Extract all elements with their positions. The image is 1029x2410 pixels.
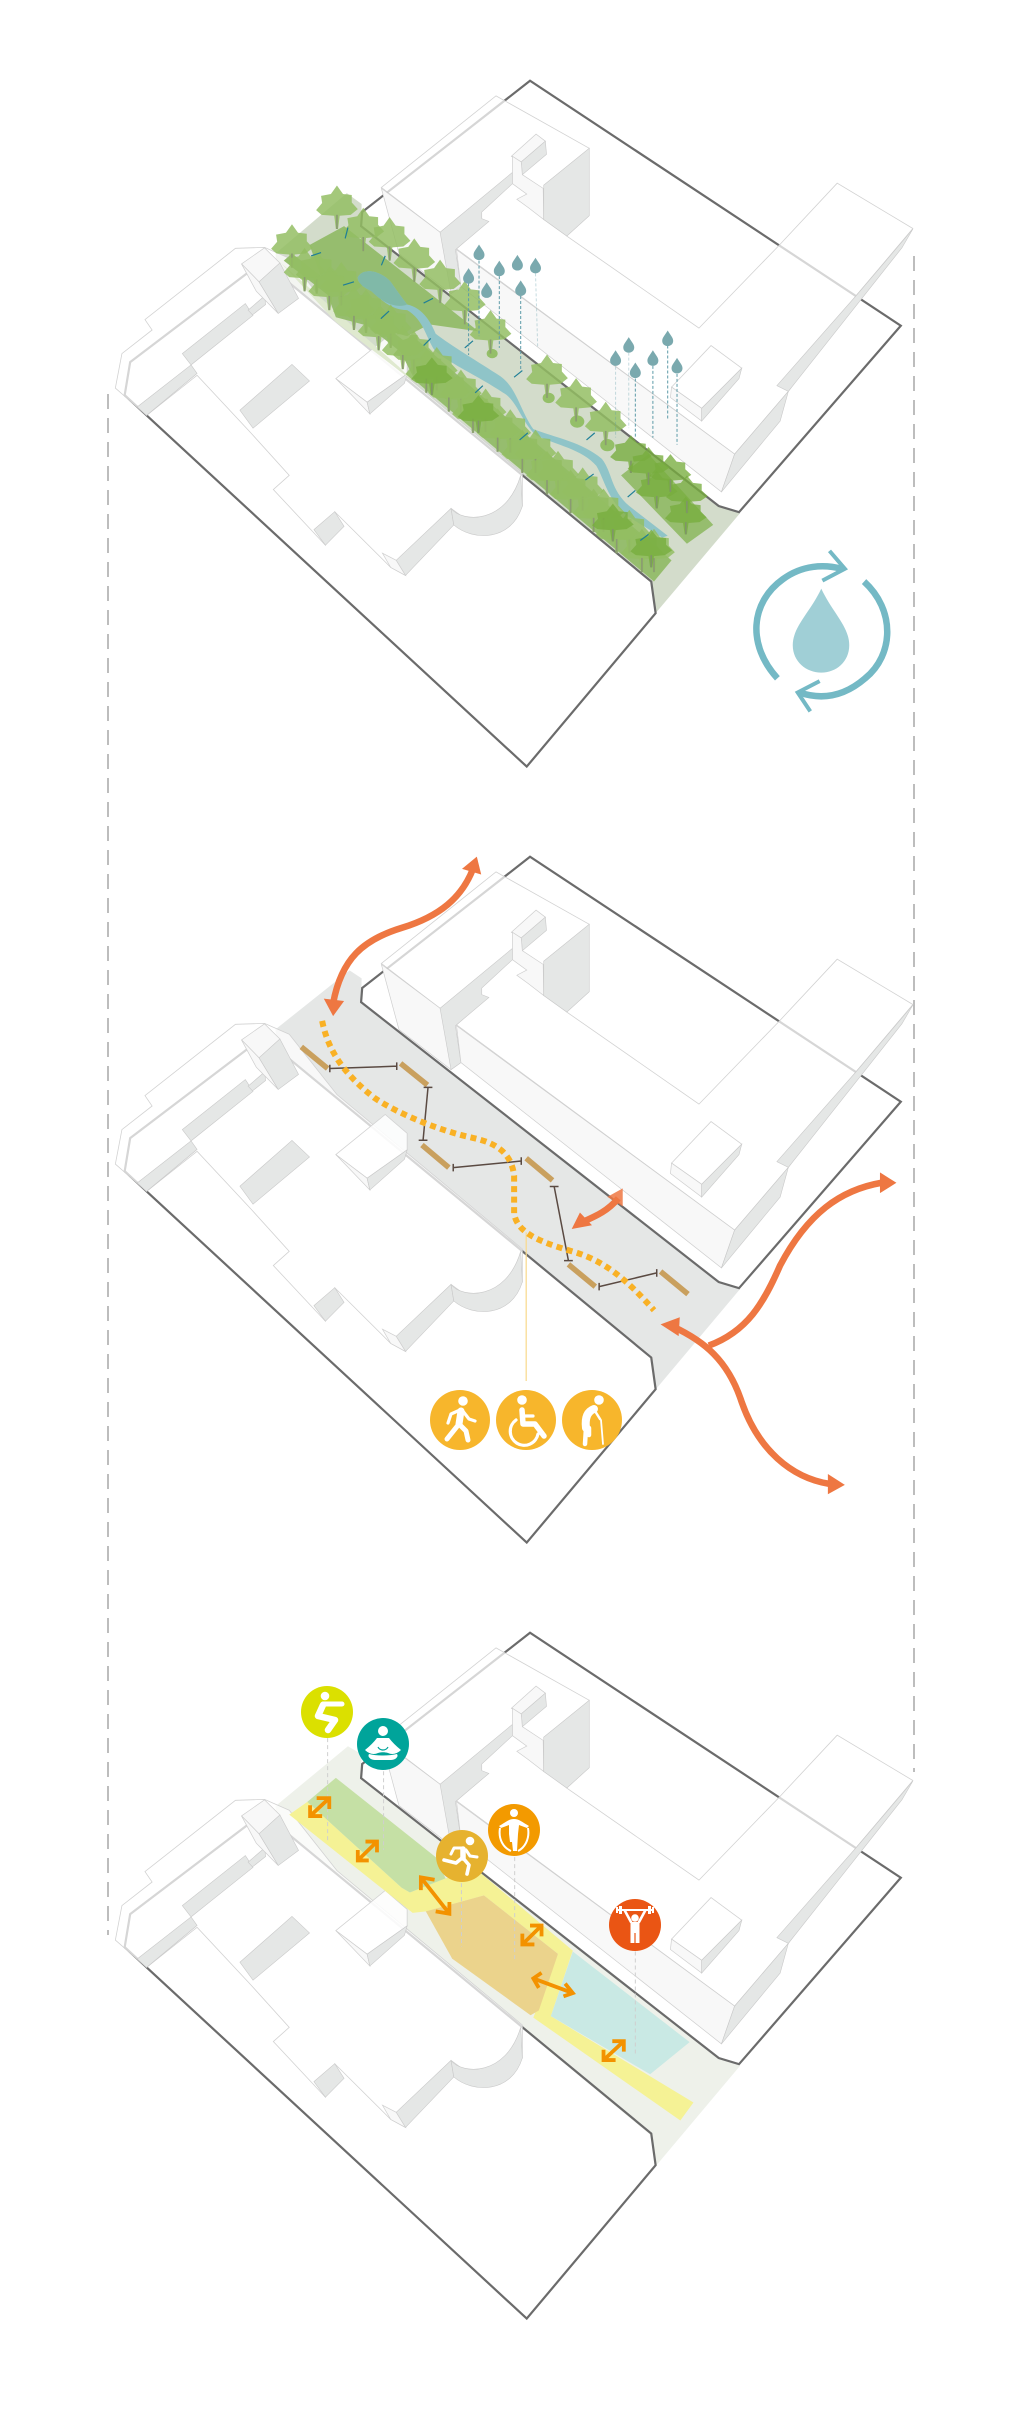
icon: weightlifter [609, 1899, 661, 1951]
accessible walking path [322, 1021, 654, 1310]
stream and pond [358, 271, 668, 538]
tree ground circles [487, 349, 614, 451]
arrow: east route [709, 1172, 896, 1346]
icon: wheelchair user [496, 1390, 556, 1450]
building massing [115, 857, 913, 1543]
dashed guide line: left [107, 394, 109, 1935]
icon: runner [436, 1830, 488, 1882]
arrow: north route [324, 857, 481, 1016]
connection arrows [310, 1798, 624, 2060]
small infiltration arrows [311, 228, 649, 540]
trees: infill row along the edge [284, 248, 663, 572]
yellow running track [289, 1802, 693, 2120]
seating bars [301, 1047, 688, 1294]
icon: squat exercise [301, 1686, 353, 1738]
street band: pale ground [276, 1746, 740, 2166]
trees: lower row [271, 224, 675, 572]
planting and water overlay [271, 186, 713, 582]
rain drops [463, 245, 683, 378]
panel: activity zones diagram [115, 1633, 913, 2319]
panel: accessibility and circulation diagram [115, 857, 913, 1543]
arrow: side entrance [572, 1188, 623, 1229]
arrow: south route [661, 1317, 845, 1494]
building massing [115, 1633, 913, 2319]
green zone [307, 1778, 446, 1893]
street band: planted ground [276, 193, 740, 613]
street band: paved ground [276, 970, 740, 1389]
icon: elderly person with cane [562, 1390, 622, 1450]
icon: meditation [357, 1718, 409, 1770]
icon: pedestrian [430, 1390, 490, 1450]
trees: darker clump [411, 357, 708, 567]
icon: jump rope [488, 1804, 540, 1856]
building massing [115, 81, 913, 767]
dimension lines [330, 1062, 657, 1290]
panel: water cycle diagram [115, 81, 913, 767]
leader line to user icons [525, 1232, 527, 1381]
teal zone [551, 1952, 690, 2074]
circulation overlay [301, 857, 896, 1494]
rain lines [469, 261, 677, 445]
icon: water recycling [756, 551, 887, 711]
icon leader lines [328, 1738, 635, 2055]
trees: upper row [316, 186, 627, 445]
orange zone [426, 1895, 558, 2015]
pale green lawn edge [281, 263, 413, 381]
dashed guide line: right [913, 256, 915, 1772]
zones overlay [289, 1738, 693, 2120]
green planting zones [284, 226, 713, 582]
